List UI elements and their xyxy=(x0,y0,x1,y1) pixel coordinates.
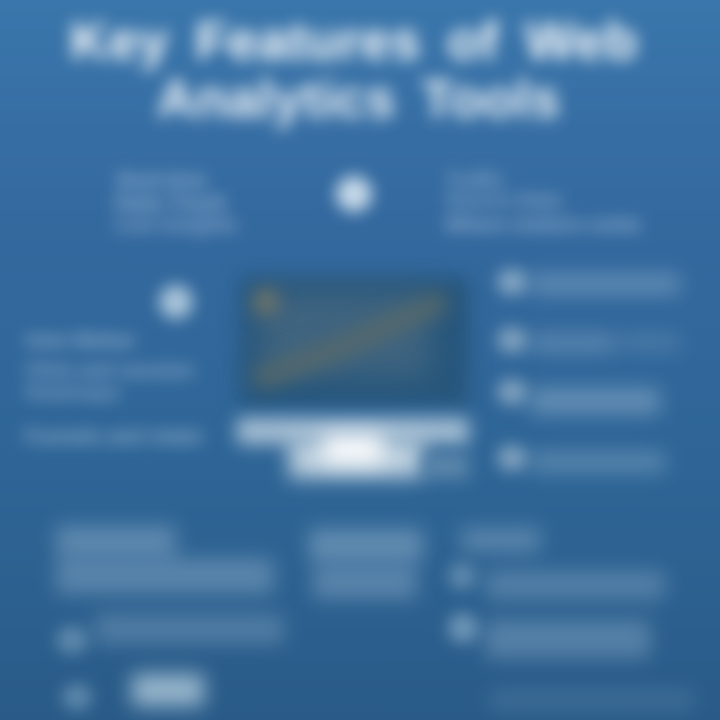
icon: top centre dot xyxy=(336,176,372,212)
heading xyxy=(56,526,176,556)
text block: top left feature: Live insights xyxy=(115,214,237,236)
text block: bottom left xyxy=(48,517,290,720)
bullet text 2 xyxy=(485,620,650,658)
icon: orange marker xyxy=(253,288,279,316)
text block: left feature xyxy=(20,326,206,451)
text block: top left feature xyxy=(110,166,240,240)
icon: bullet 1 xyxy=(448,562,476,590)
heading xyxy=(461,528,541,552)
detail line xyxy=(94,614,284,644)
monitor bezel xyxy=(237,418,469,444)
icon: small dot xyxy=(56,626,88,654)
text block: top right feature xyxy=(440,166,644,238)
text block: left feature: Click and session xyxy=(25,360,194,382)
text block: left feature: Funnels and retain xyxy=(25,426,203,448)
stand highlight xyxy=(323,436,383,462)
text block: left feature: Heatmaps xyxy=(25,382,121,404)
line chart: rising trend xyxy=(248,288,452,392)
text block: left feature: User Behav xyxy=(25,330,135,352)
monitor illustration xyxy=(225,268,481,493)
list item 4 xyxy=(490,437,670,480)
title: Analytics Tools xyxy=(157,70,560,129)
highlighted badge xyxy=(132,674,204,706)
text block: top right feature: Where visitors come xyxy=(445,214,641,236)
text block: top left feature: Real-time xyxy=(117,170,207,192)
text block: top left feature: Data Track xyxy=(115,190,226,215)
monitor stand xyxy=(289,438,423,478)
list item 2 xyxy=(490,319,680,361)
text block: top right feature: Source Data xyxy=(445,190,562,212)
body lines xyxy=(56,558,274,594)
icon: bottom dot xyxy=(62,684,92,710)
chart panel on screen xyxy=(259,292,429,376)
text block: top right feature: Traffic xyxy=(445,170,505,192)
list item 3 xyxy=(490,371,668,424)
stand shadow right xyxy=(425,454,469,478)
title xyxy=(60,10,646,138)
footer line xyxy=(489,690,694,710)
title: Key Features of Web xyxy=(70,12,638,71)
icon: left dot xyxy=(159,285,193,319)
text block: bottom centre xyxy=(300,520,432,608)
monitor screen xyxy=(241,278,469,406)
list: right features xyxy=(490,261,686,480)
bullet text 1 xyxy=(485,570,665,600)
icon: bullet 2 xyxy=(448,613,478,643)
list item 1 xyxy=(490,261,686,304)
list: bottom right xyxy=(441,520,690,712)
